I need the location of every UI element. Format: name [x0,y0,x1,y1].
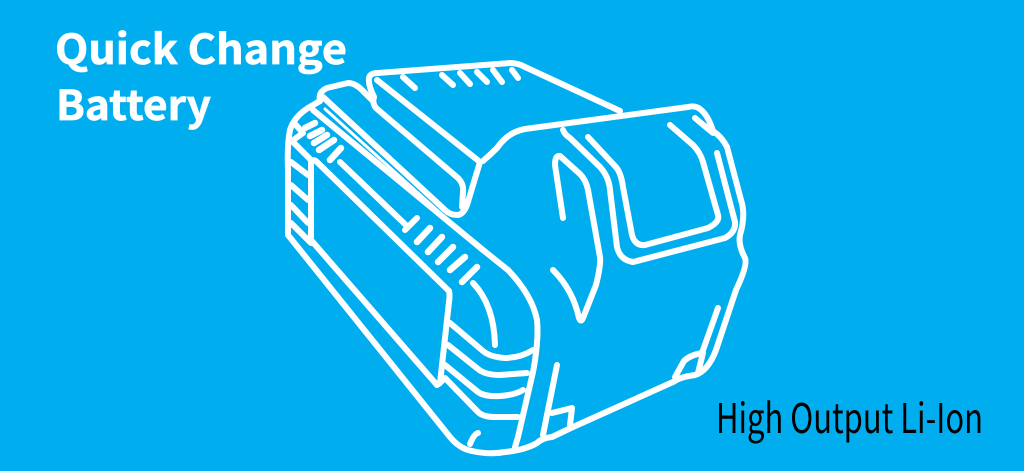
top ridge [369,63,620,111]
heading: Quick Change Battery: Battery [56,72,211,132]
comb marks lower [417,228,477,282]
left foot [543,365,572,435]
bottom edge strip [0,471,1024,473]
top ridge notches [403,70,518,88]
window corner line [695,118,713,133]
heading: Quick Change Battery [55,16,347,132]
right foot [675,308,718,377]
window outer frame [563,130,735,262]
battery outer silhouette [288,101,746,453]
right ribs [450,323,533,358]
upper front band [313,110,538,447]
window inner frame [588,125,718,245]
heading: Quick Change Battery: Quick Change [55,16,347,76]
left grip mark [553,156,600,320]
inner front arc [473,283,495,345]
left cap and rail [320,83,372,101]
icon: battery line drawing [288,63,746,453]
contact slot line [340,162,417,230]
label panel [311,160,450,385]
thin rail line [325,109,458,229]
bottom hook [470,433,478,444]
upper left connector [292,125,311,160]
left ribs [291,162,311,243]
comb marks top left [305,123,341,160]
